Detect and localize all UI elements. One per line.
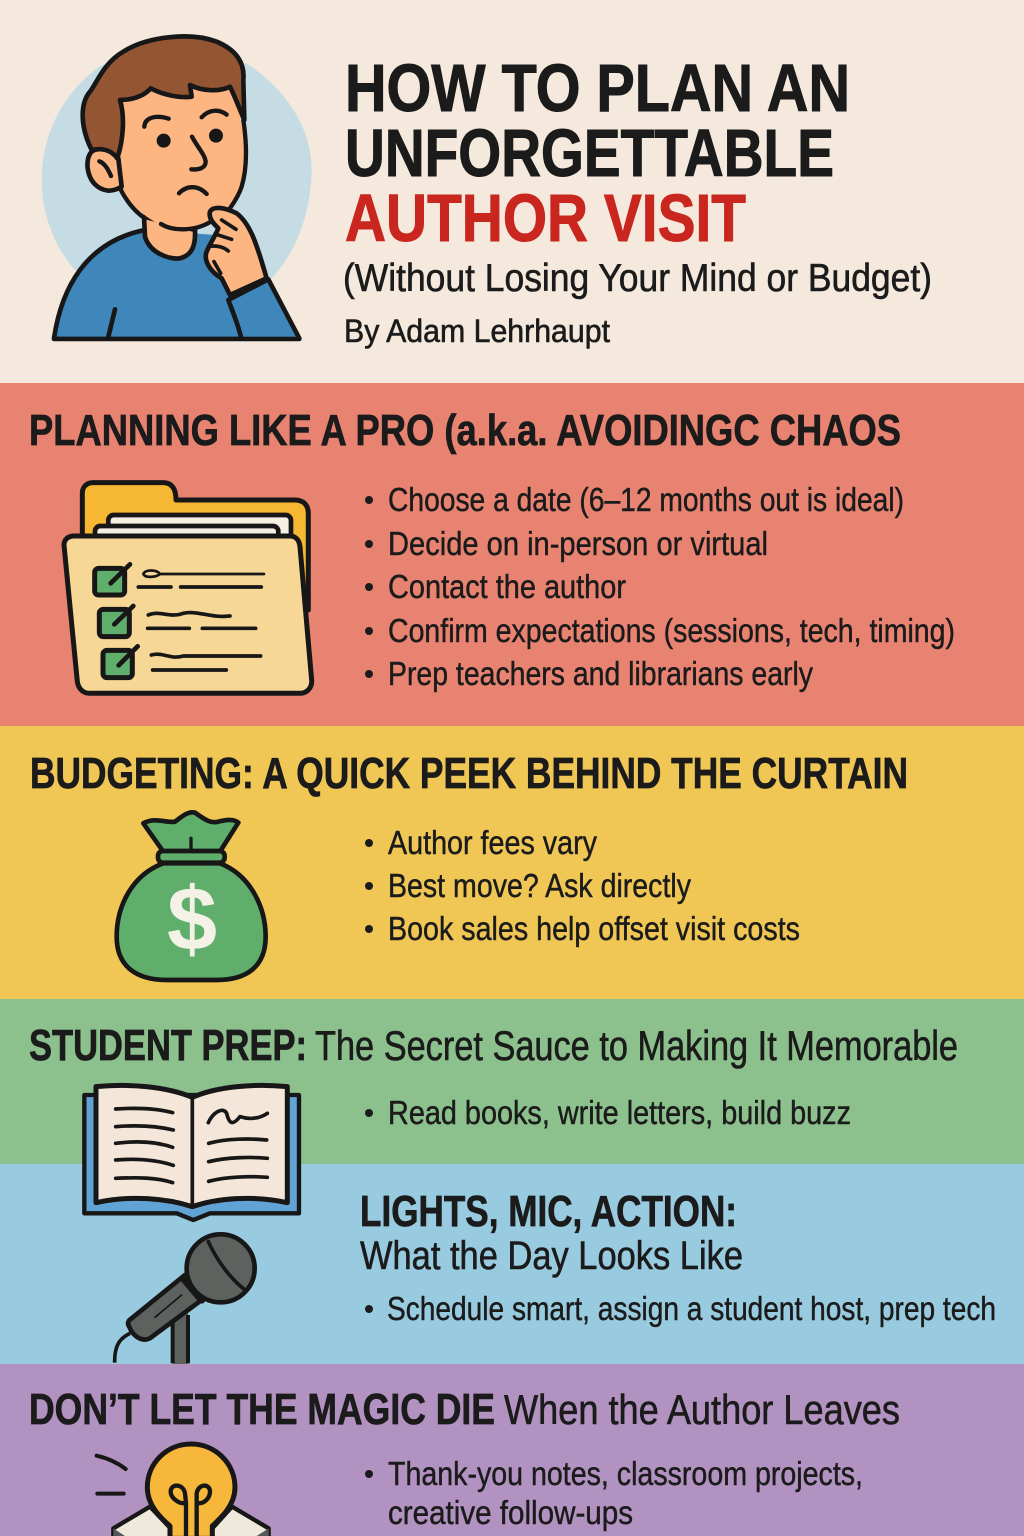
list: planning bullets: Contact the author [388,568,626,605]
list: budgeting bullets: Best move? Ask directly [388,867,691,904]
icon: checklist folder [64,483,312,693]
title: AUTHOR VISIT [345,181,746,256]
text: day of visit heading [360,1187,743,1278]
panel: day of visit [0,1164,1024,1364]
title [345,51,850,256]
panel: header [0,0,1024,383]
icon: money bag: $ [167,870,217,970]
list: planning bullets: Decide on in-person or virtual [388,525,768,562]
list: budgeting bullets: Book sales help offset visit costs [388,910,800,947]
byline: By Adam Lehrhaupt [344,313,610,349]
icon: thinking person [42,36,312,339]
list: follow-up bullet: creative follow-ups [388,1494,633,1531]
title: UNFORGETTABLE [345,116,834,191]
list: planning bullets [365,481,955,692]
icon: microphone [115,1234,255,1364]
subtitle: (Without Losing Your Mind or Budget) [343,257,932,300]
list: student prep bullet: Read books, write letters, build buzz [388,1094,851,1131]
list: planning bullets: Choose a date (6–12 months out is ideal) [388,481,904,518]
panel: budgeting [0,726,1024,999]
text: day of visit heading: What the Day Looks Like [360,1234,743,1278]
list: follow-up bullet [365,1455,863,1531]
heading: follow-up: DON’T LET THE MAGIC DIE [29,1385,495,1434]
list: budgeting bullets [365,824,800,947]
title: HOW TO PLAN AN [345,51,850,126]
list: follow-up bullet: Thank-you notes, classroom projects, [388,1455,863,1492]
icon: money bag [117,812,266,980]
list: budgeting bullets: Author fees vary [388,824,597,861]
panel: student prep [0,999,1024,1164]
heading: follow-up [29,1385,900,1434]
panel: planning [0,383,1024,726]
text: day of visit heading: LIGHTS, MIC, ACTION: [360,1187,737,1236]
heading: student prep [29,1021,958,1070]
heading: student prep: STUDENT PREP: [29,1021,307,1070]
list: planning bullets: Prep teachers and librarians early [388,655,813,692]
heading: follow-up: When the Author Leaves [504,1386,900,1433]
panel: follow-up [0,1364,1024,1536]
icon: lightbulb and open box [97,1444,269,1536]
icon: open book [84,1085,299,1220]
